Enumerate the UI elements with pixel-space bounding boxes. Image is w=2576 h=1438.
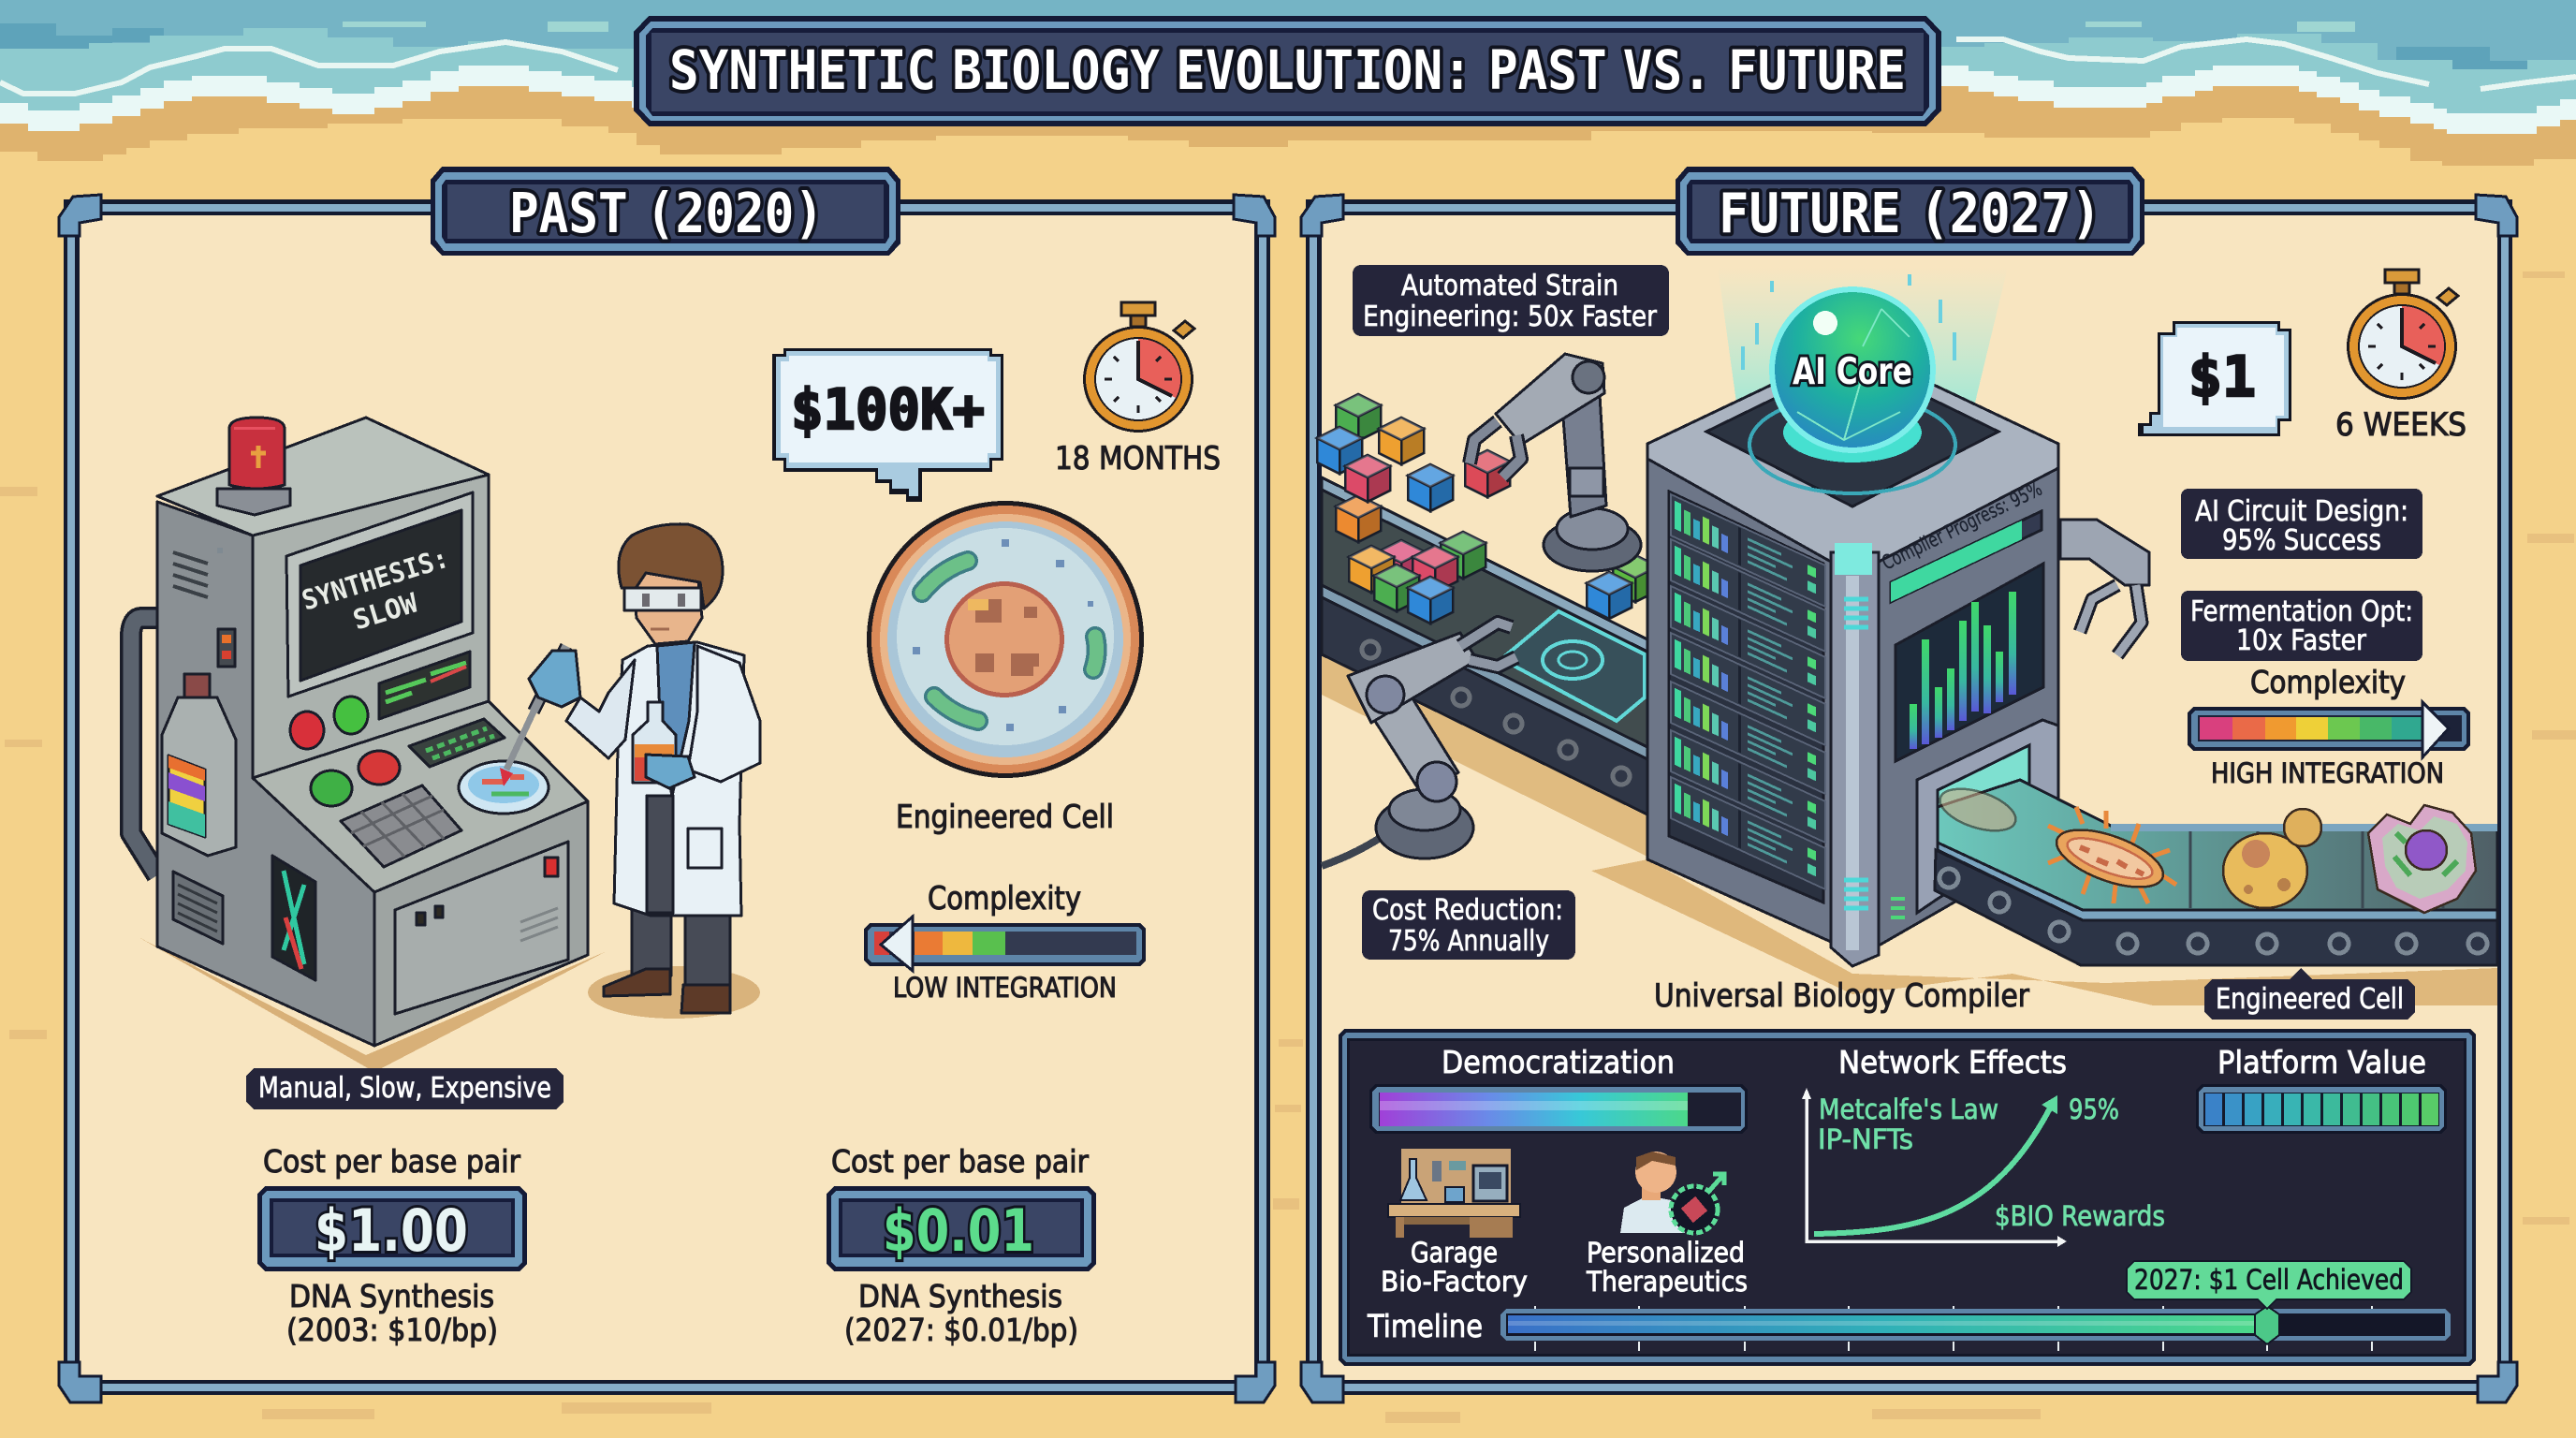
tag: 2027 milestone: [2127, 1261, 2411, 1309]
label: engineered cell: Engineered Cell: [896, 799, 1114, 836]
tag: cost reduction: 75% Annually: [1388, 925, 1549, 958]
icon: lower robot arm: [1322, 623, 1516, 866]
conveyor: output belt: [1935, 780, 2497, 965]
gauge: low complexity: [864, 917, 1146, 971]
callout: cost $100K+: $100K+: [791, 377, 985, 443]
gauge: high complexity: [2188, 702, 2470, 757]
tag: automated strain engineering: Engineering: 50x Faster: [1363, 301, 1658, 333]
title: SYNTHETIC BIOLOGY EVOLUTION: PAST VS. FUTURE: [669, 38, 1906, 102]
tag: fermentation optimisation: [2181, 591, 2422, 661]
tag: automated strain engineering: Automated Strain: [1401, 270, 1618, 302]
metric: cost per base pair 2027: [827, 1143, 1096, 1348]
panel: past (2020): [59, 167, 1275, 1402]
label: complexity: Complexity: [928, 880, 1081, 917]
icon: coloured blocks: [1317, 394, 1658, 624]
tag: engineered cell: [2204, 968, 2415, 1020]
metric: cost per base pair 2003: [257, 1143, 527, 1348]
panel: metrics dashboard: [1339, 1029, 2476, 1366]
tag: ai circuit design: [2181, 489, 2422, 559]
tag: engineered cell: Engineered Cell: [2216, 983, 2404, 1016]
heading: network effects: Network Effects: [1838, 1044, 2067, 1080]
label: 18 months: 18 MONTHS: [1055, 440, 1221, 477]
label: garage bio-factory: [1381, 1237, 1528, 1298]
label: personalized therapeutics: [1586, 1237, 1748, 1298]
illustration: synthesis machine: [131, 418, 607, 1072]
icon: ai core orb: [1743, 274, 1954, 462]
icon: stopwatch 6 weeks: [2347, 270, 2458, 400]
callout: cost $100K+: [772, 348, 1003, 502]
heading: past: PAST (2020): [509, 181, 824, 245]
chart: network effects curve: 95%: [2069, 1093, 2119, 1125]
icon: engineered cell: [867, 501, 1144, 778]
label: personalized therapeutics: Personalized: [1587, 1237, 1745, 1269]
heading: past: [431, 167, 900, 256]
gauge: platform value: [2196, 1084, 2447, 1134]
tag: ai circuit design: AI Circuit Design:: [2195, 495, 2408, 528]
label: garage bio-factory: Bio-Factory: [1381, 1266, 1528, 1298]
label: high integration: HIGH INTEGRATION: [2211, 757, 2444, 789]
metric: cost per base pair 2003: $1.00: [315, 1196, 468, 1265]
tag: manual slow expensive: [246, 1068, 564, 1109]
illustration: universal biology compiler tower: [1591, 267, 2497, 1005]
chart: network effects curve: [1802, 1088, 2165, 1247]
metric: cost per base pair 2027: (2027: $0.01/bp): [844, 1312, 1078, 1348]
tag: 2027 milestone: 2027: $1 Cell Achieved: [2134, 1264, 2404, 1296]
tag: automated strain engineering: [1353, 265, 1669, 336]
metric: cost per base pair 2003: Cost per base pair: [263, 1143, 520, 1180]
metric: cost per base pair 2027: Cost per base pair: [831, 1143, 1089, 1180]
heading: democratization: Democratization: [1442, 1044, 1675, 1080]
metric: cost per base pair 2027: DNA Synthesis: [858, 1278, 1062, 1314]
conveyor: input belt with blocks: [1322, 477, 1647, 857]
label: garage bio-factory: Garage: [1411, 1237, 1498, 1269]
icon: garage bench: [1388, 1149, 1520, 1238]
chart label: compiler progress: Compiler Progress: 95%: [1879, 477, 2045, 574]
screen text: synthesis slow: SYNTHESIS:: [298, 542, 452, 617]
gauge: democratization: [1369, 1084, 1748, 1134]
metric: cost per base pair 2003: DNA Synthesis: [289, 1278, 494, 1314]
tag: fermentation optimisation: 10x Faster: [2236, 624, 2367, 657]
heading: future: [1676, 167, 2144, 256]
label: personalized therapeutics: Therapeutics: [1586, 1266, 1748, 1298]
tag: fermentation optimisation: Fermentation Opt:: [2190, 595, 2413, 628]
chart: network effects curve: $BIO Rewards: [1995, 1200, 2165, 1232]
screen text: synthesis slow: [298, 542, 462, 649]
tag: cost reduction: Cost Reduction:: [1372, 894, 1563, 927]
icon: right robot gripper: [2060, 520, 2149, 655]
tag: cost reduction: [1362, 890, 1575, 960]
chart: timeline bar: [1500, 1306, 2451, 1351]
callout: cost $1: $1: [2188, 345, 2256, 410]
heading: future: FUTURE (2027): [1719, 181, 2101, 245]
panel: future (2027): [634, 16, 2517, 1402]
tag: ai circuit design: 95% Success: [2222, 524, 2381, 557]
label: complexity: Complexity: [2250, 664, 2406, 700]
label: 6 weeks: 6 WEEKS: [2335, 406, 2466, 444]
chart: network effects curve: IP-NFTs: [1818, 1123, 1913, 1155]
heading: platform value: Platform Value: [2217, 1044, 2426, 1080]
label: timeline: Timeline: [1367, 1308, 1483, 1344]
metric: cost per base pair 2003: (2003: $10/bp): [286, 1312, 498, 1348]
icon: patient and therapeutic: [1620, 1152, 1724, 1233]
icon: upper robot arm: [1470, 354, 1641, 571]
tag: manual slow expensive: Manual, Slow, Expensive: [258, 1072, 551, 1105]
title: [634, 16, 1941, 126]
illustration: scientist: [500, 524, 760, 1019]
label: low integration: LOW INTEGRATION: [893, 972, 1117, 1004]
microbes on belt: [1935, 781, 2476, 913]
icon: ai core orb: AI Core: [1793, 351, 1912, 393]
chart: network effects curve: Metcalfe's Law: [1819, 1093, 1998, 1125]
callout: cost $1: [2138, 321, 2291, 436]
label: universal biology compiler: Universal Biology Compiler: [1654, 977, 2029, 1015]
icon: stopwatch 18 months: [1083, 302, 1194, 433]
metric: cost per base pair 2027: $0.01: [883, 1196, 1034, 1265]
screen text: synthesis slow: SLOW: [349, 586, 421, 637]
